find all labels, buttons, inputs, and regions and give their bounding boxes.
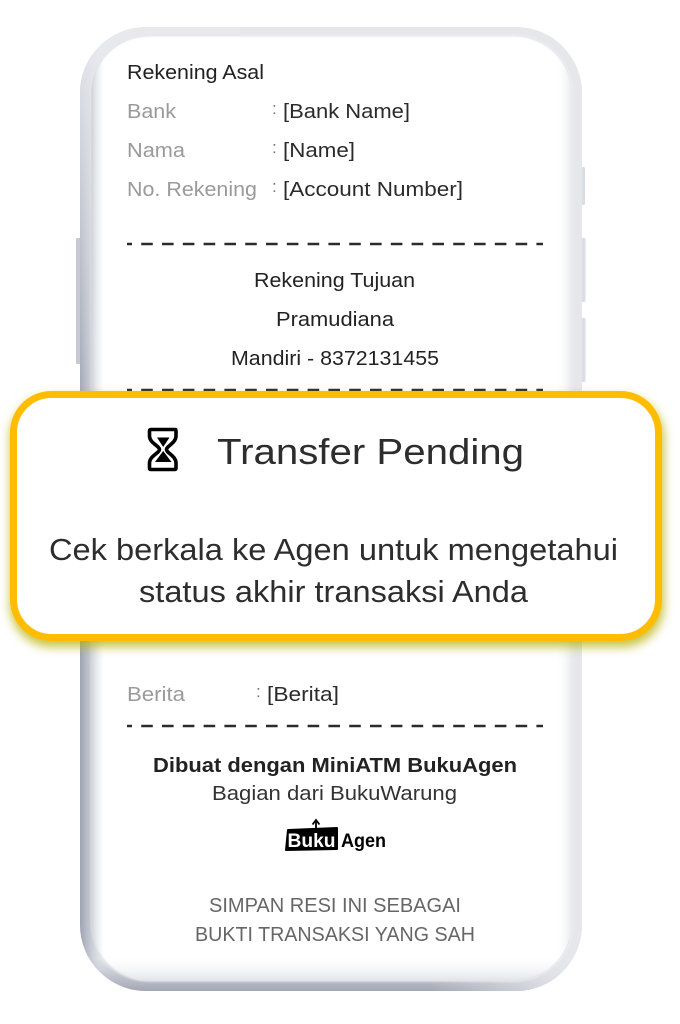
callout message xyxy=(49,532,618,609)
logo: BukuAgen: Agen xyxy=(341,831,386,852)
phone left edge shading xyxy=(80,27,582,991)
row: bank: [Bank Name] xyxy=(283,101,410,123)
row: berita xyxy=(127,682,339,706)
source account section xyxy=(127,62,463,201)
callout: transfer pending xyxy=(10,394,664,647)
footer note: SIMPAN RESI INI SEBAGAI xyxy=(209,895,461,917)
row: bank xyxy=(127,99,410,123)
row: account number: : xyxy=(272,177,277,196)
footer note xyxy=(195,895,475,946)
destination account section: Mandiri - 8372131455 xyxy=(231,348,439,370)
screen outline xyxy=(91,36,572,981)
row: name: : xyxy=(272,138,277,157)
row: name: [Name] xyxy=(283,140,355,162)
right side button bottom xyxy=(580,318,586,382)
phone screen xyxy=(91,36,572,981)
footer credit xyxy=(153,755,517,805)
row: name xyxy=(127,138,355,162)
screen right shading xyxy=(91,36,572,981)
icon: hourglass xyxy=(150,430,176,470)
right side button middle xyxy=(580,238,586,302)
left side button xyxy=(76,238,84,364)
row: berita: Berita xyxy=(127,684,186,706)
row: account number: [Account Number] xyxy=(283,179,463,201)
logo: BukuAgen xyxy=(285,820,386,852)
phone bottom edge shading xyxy=(80,27,582,991)
logo: BukuAgen: Buku xyxy=(288,831,336,852)
callout title: Transfer Pending xyxy=(217,431,524,472)
callout message: Cek berkala ke Agen untuk mengetahui xyxy=(49,532,618,567)
destination account section: Rekening Tujuan xyxy=(254,270,415,292)
phone right edge lightening xyxy=(80,27,582,991)
callout card xyxy=(14,394,658,638)
phone top fade xyxy=(80,27,240,420)
row: account number: No. Rekening xyxy=(127,179,257,201)
phone mockup xyxy=(76,27,586,991)
row: berita: [Berita] xyxy=(267,684,339,706)
row: name: Nama xyxy=(127,140,186,162)
heading: Rekening Asal: Rekening Asal xyxy=(127,62,264,84)
row: bank: Bank xyxy=(127,101,177,123)
destination account section xyxy=(231,270,439,370)
destination account section: Pramudiana xyxy=(276,309,395,331)
right side button top xyxy=(580,167,585,205)
footer credit: Dibuat dengan MiniATM BukuAgen xyxy=(153,755,517,777)
footer note: BUKTI TRANSAKSI YANG SAH xyxy=(195,924,475,946)
row: account number xyxy=(127,177,463,201)
phone body xyxy=(80,27,582,991)
row: berita: : xyxy=(256,682,261,701)
screen bottom shading xyxy=(91,36,572,981)
callout message: status akhir transaksi Anda xyxy=(139,574,529,609)
footer credit: Bagian dari BukuWarung xyxy=(212,783,457,805)
row: bank: : xyxy=(272,99,277,118)
callout shadow xyxy=(10,396,664,647)
